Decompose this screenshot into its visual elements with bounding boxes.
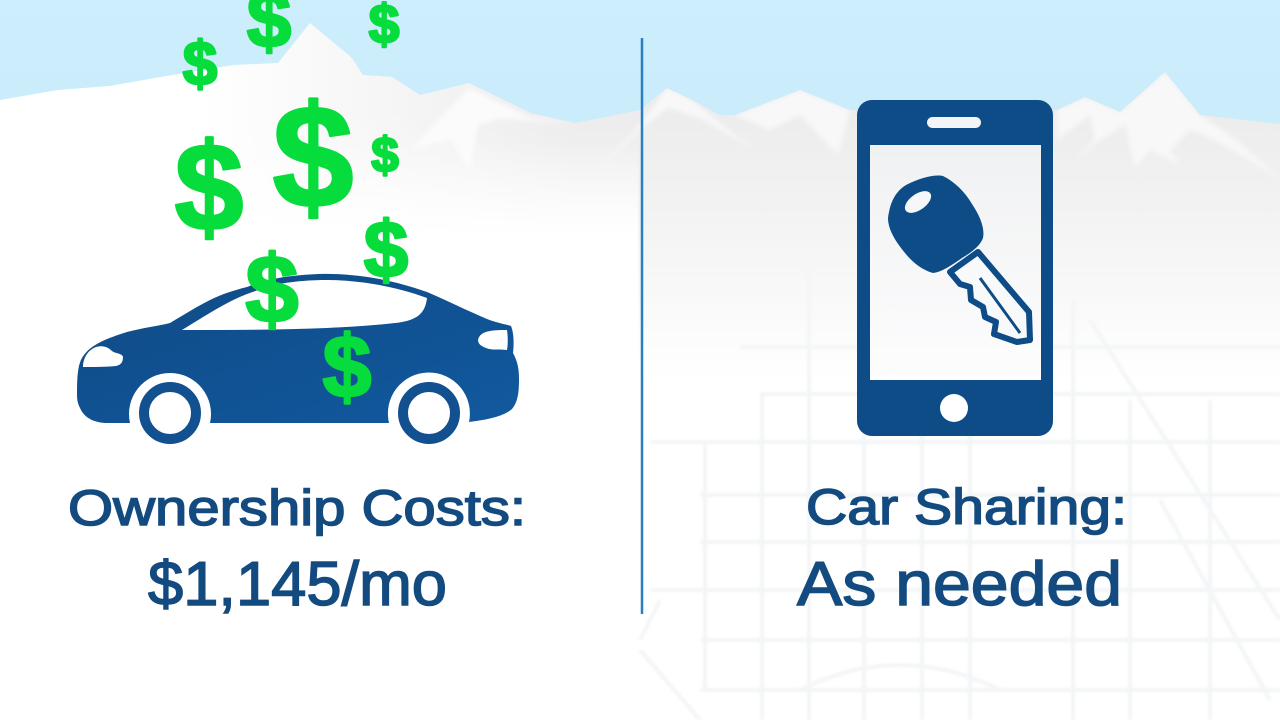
icon: falling dollar signs: $: [371, 129, 399, 183]
icon: falling dollar signs: [175, 0, 408, 416]
car headlight: [83, 346, 123, 367]
background: mountains: [0, 23, 1280, 270]
icon: car: [77, 274, 519, 439]
panel: ownership costs: [68, 0, 526, 619]
car tail light: [478, 330, 508, 350]
icon: falling dollar signs: $: [245, 236, 299, 343]
panel: car sharing: [797, 100, 1127, 619]
car window: [182, 280, 427, 330]
heading: ownership costs: Ownership Costs:: [68, 480, 526, 536]
icon: car key: [888, 175, 1030, 342]
value: as needed: As needed: [797, 550, 1122, 619]
icon: falling dollar signs: $: [175, 119, 243, 257]
phone speaker: [927, 117, 981, 128]
car rear wheel: [403, 387, 455, 439]
icon: falling dollar signs: $: [364, 205, 408, 294]
phone screen: [870, 145, 1041, 380]
icon: falling dollar signs: $: [272, 75, 354, 238]
value: ownership cost per month: $1,145/mo: [148, 550, 447, 619]
divider line: [641, 38, 643, 614]
background: faint street map: [640, 250, 1280, 720]
background: sky: [0, 0, 1280, 260]
car front wheel: [144, 387, 196, 439]
phone home button: [940, 394, 968, 422]
icon: smartphone: [857, 100, 1053, 436]
icon: falling dollar signs: $: [323, 317, 371, 416]
heading: car sharing: Car Sharing:: [806, 479, 1127, 535]
icon: falling dollar signs: $: [183, 30, 217, 99]
